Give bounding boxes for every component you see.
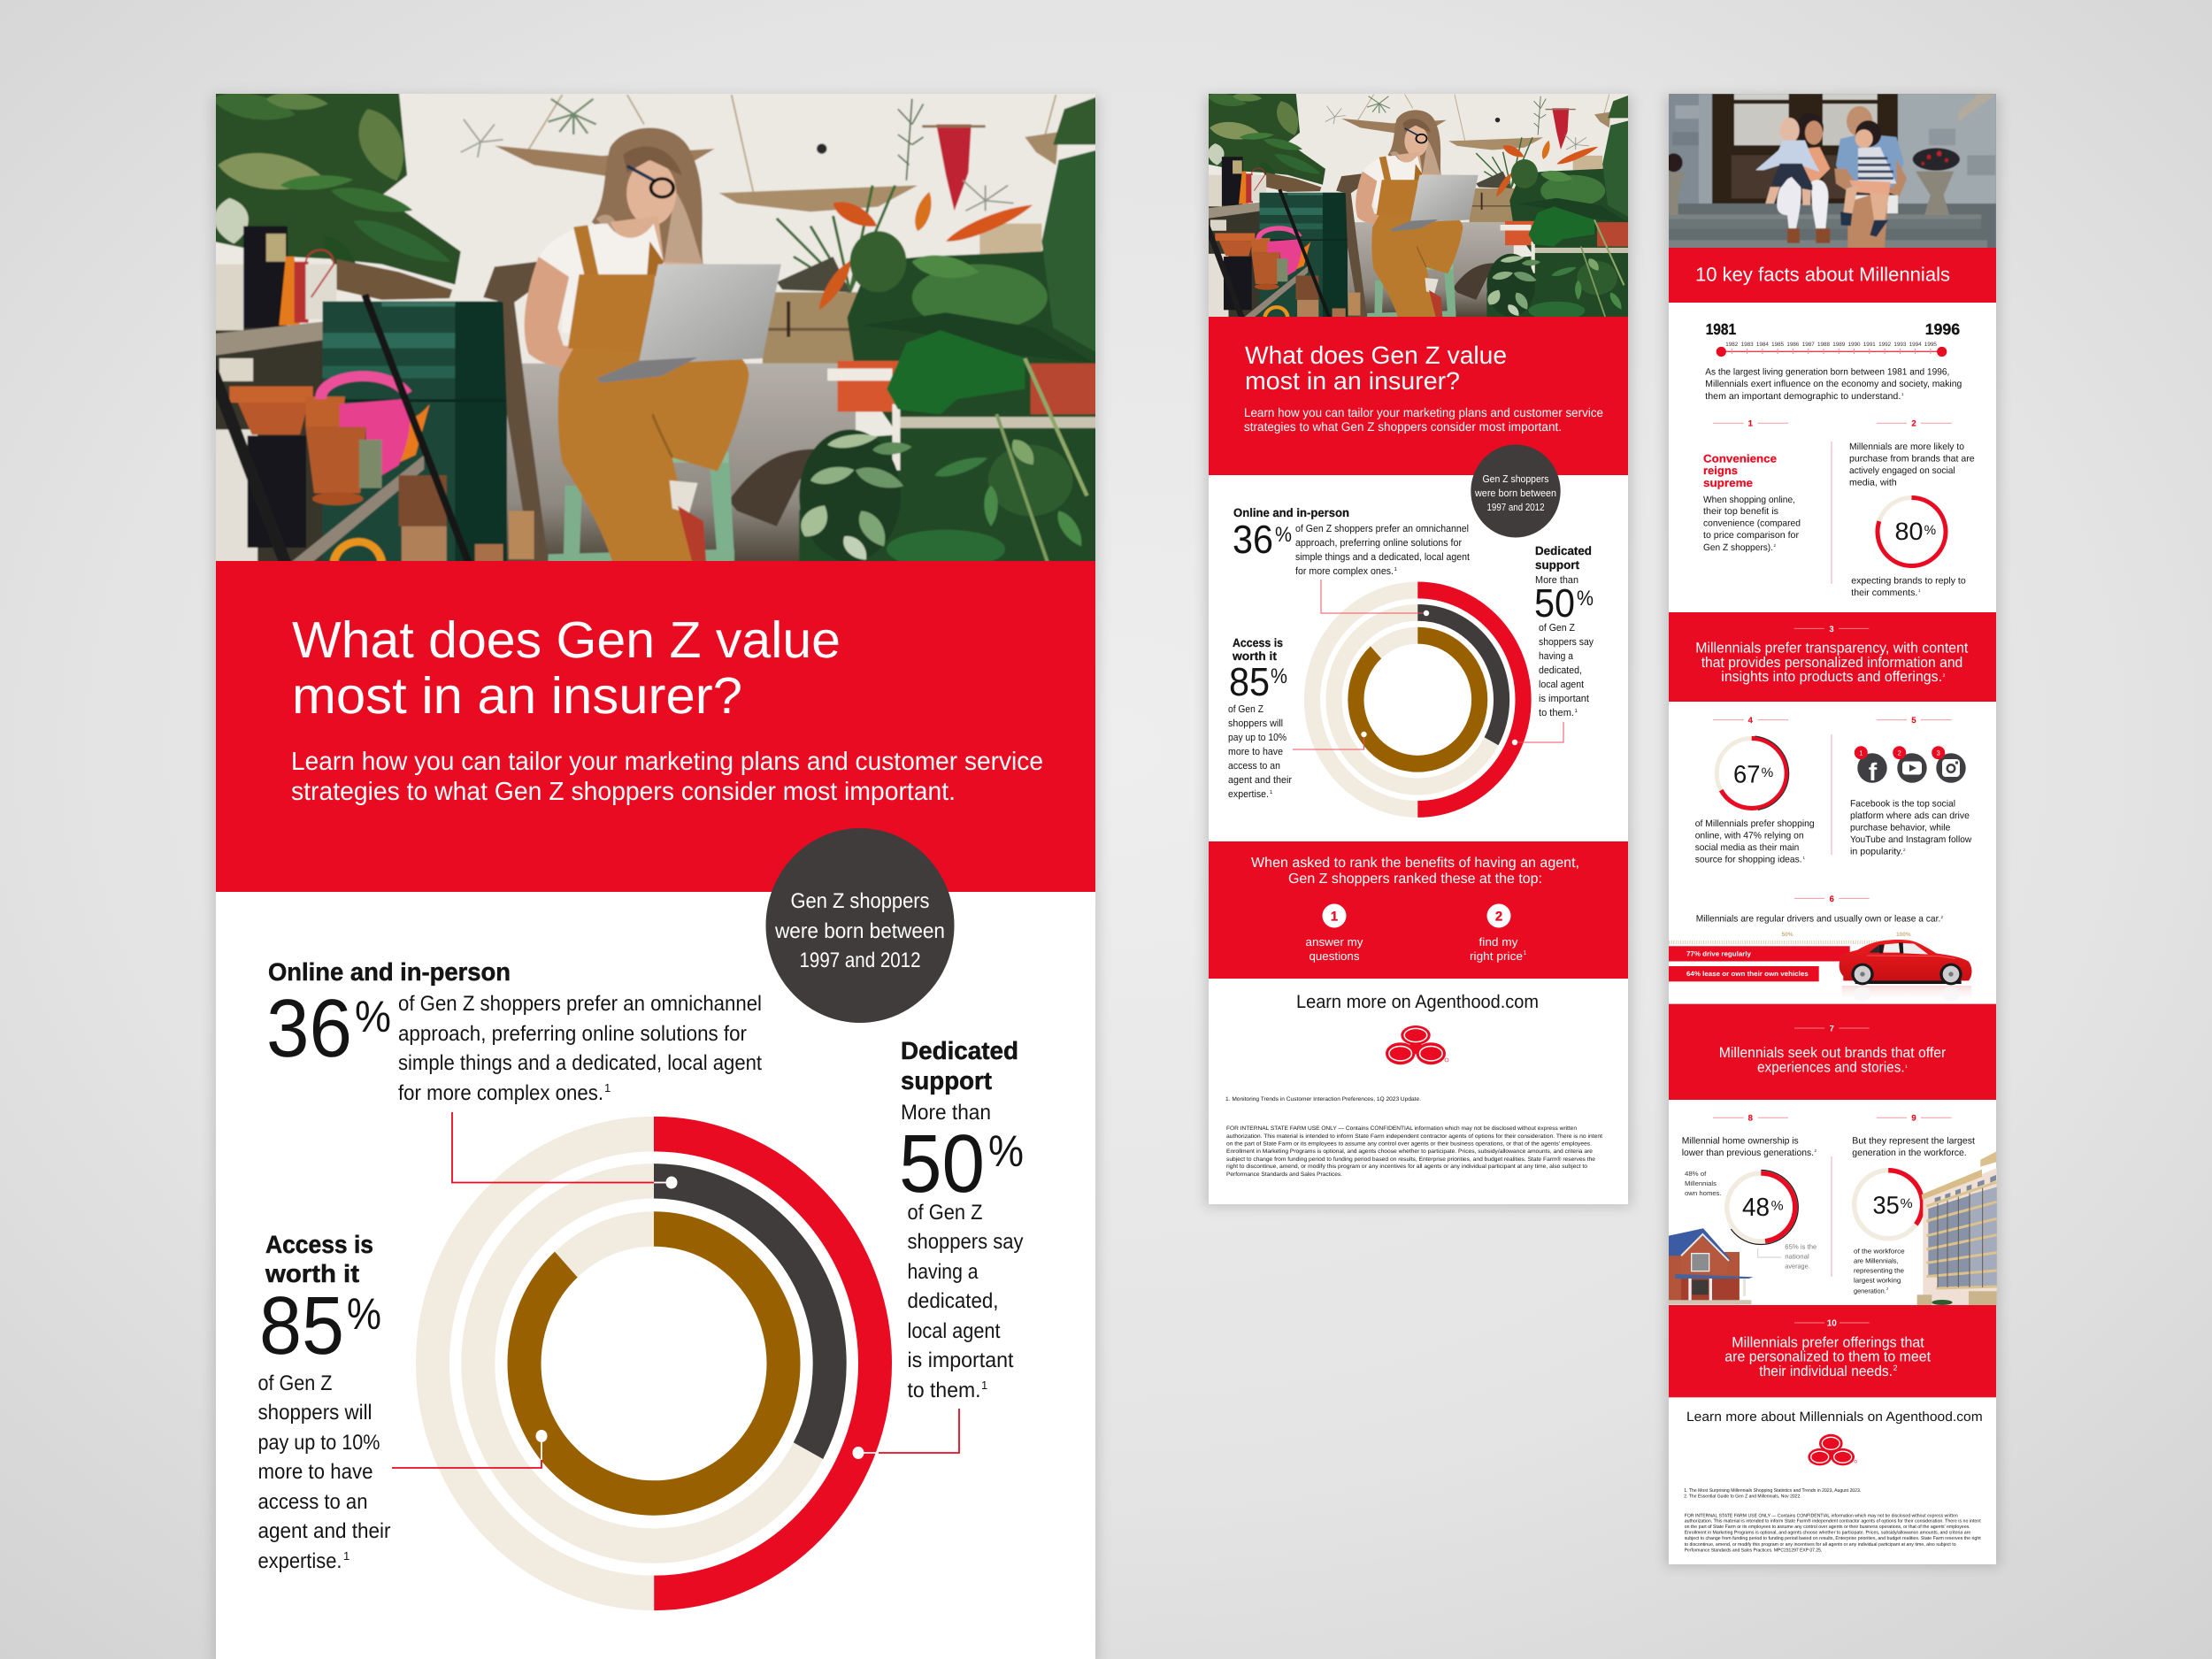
fact 5: social platforms: YouTube and Instagram follow [1850,834,1972,845]
footnote: 1. Monitoring Trends in Customer Interaction Preferences, 1Q 2023 Update. [1225,1096,1421,1102]
stat: access is worth it 85%: expertise. [1228,789,1269,800]
photo: family on front steps [1663,88,2000,252]
fact 2: social media 80%: Millennials are more likely to [1849,442,1964,452]
benefit 2: right price [1470,949,1523,963]
stat: access is worth it 85%: access to an [1228,761,1280,772]
subtitle [291,748,1043,806]
subtitle: strategies to what Gen Z shoppers consider most important. [1244,419,1562,434]
fact 5 heading number [1877,716,1952,726]
fact 6: drivers bar chart [1669,913,1971,1002]
fact 9: workforce 35%: are Millennials, [1854,1256,1899,1264]
fact 9: workforce 35%: largest working [1854,1276,1901,1284]
bar: own or lease [1669,966,1819,981]
donut 35%: % [1901,1196,1913,1211]
stat: access is worth it 85%: shoppers will [258,1401,372,1425]
stat: access is worth it 85%: more to have [1228,747,1283,757]
timeline 1981 to 1996: 1991 [1863,342,1876,348]
subtitle: Learn how you can tailor your marketing plans and customer service [1244,405,1603,419]
title [1245,342,1507,395]
red band: fact 7: 1 [1905,1064,1908,1070]
stat: access is worth it 85%: pay up to 10% [258,1431,380,1455]
callout circle: birth years: Gen Z shoppers [1483,474,1549,485]
legal text: Enrollment in Marketing Programs is optional, and agents choose whether to participate. Prices, subsidy/allowance amounts, and criteria are [1226,1148,1593,1155]
fact 8 heading number: 8 [1748,1114,1753,1124]
fact 2: social media 80%: purchase from brands that are [1849,453,1975,464]
fact 1: convenience: When shopping online, [1703,495,1795,505]
fact 2: social media 80%: 1 [1918,588,1921,593]
illustration: office building [1917,1152,1997,1305]
bar: drive regularly [1669,946,1850,961]
fact 2: social media 80%: expecting brands to reply to [1851,575,1966,586]
stat: dedicated support 50%: to them. [908,1379,980,1402]
fact 5: social platforms: 2 [1903,848,1906,852]
stat: online and in-person 36% [1233,506,1471,577]
donut 67%: 67 [1733,761,1761,788]
stat: access is worth it 85%: agent and their [1228,775,1292,786]
red band: fact 10: 10 [1827,1318,1837,1329]
stat: online and in-person 36%: of Gen Z shoppers prefer an omnichannel [398,992,762,1016]
intro text: 1 [1901,392,1904,396]
stat: dedicated support 50%: % [988,1126,1024,1176]
callout circle: birth years: Gen Z shoppers [791,889,929,913]
fact 5: social platforms [1850,746,1972,857]
stat: dedicated support 50%: of Gen Z [1539,623,1575,634]
stat: access is worth it 85%: % [347,1289,381,1339]
panel: 10 key facts about Millennials [1663,88,2000,1567]
title: What does Gen Z value [292,611,841,669]
fact 1 heading number: 1 [1748,419,1754,428]
stat: dedicated support 50%: More than [901,1101,991,1125]
fact 8 heading number [1713,1114,1788,1124]
stat: dedicated support 50% [899,1037,1024,1402]
fact 4 heading number: 4 [1748,716,1754,726]
red band: fact 3: Millennials prefer transparency, with content [1695,641,1969,657]
red band: fact 10: are personalized to them to meet [1724,1349,1931,1365]
stat: dedicated support 50%: Dedicated [1535,544,1592,557]
subtitle [1244,405,1603,434]
stat: dedicated support 50%: shoppers say [1539,637,1594,648]
stat: online and in-person 36%: for more complex ones. [1295,566,1394,577]
legal text: on the part of State Farm or its employees to assume any control over agents or their business operations, or that of the agents' employees. [1685,1525,1970,1530]
donut 67% [1711,733,1792,814]
legal text [1226,1125,1602,1178]
fact 4: online shopping 67%: online, with 47% relying on [1695,830,1804,841]
red band: fact 7: Millennials seek out brands that offer [1719,1045,1947,1061]
panel: small Gen Z infographic [1205,90,1632,1207]
fact 8: home ownership 48%: own homes. [1685,1189,1722,1197]
leader line: dedicated support [853,1409,959,1459]
footnotes: 1. The Most Surprising Millennials Shopping Statistics and Trends in 2023, August 2023. [1684,1488,1861,1494]
timeline 1981 to 1996: 1987 [1802,342,1815,348]
fact 6: drivers bar chart: 100% [1896,932,1911,938]
fact 1: convenience: their top benefit is [1703,506,1778,517]
timeline 1981 to 1996: 1985 [1771,342,1785,348]
fact 5 heading number: 5 [1911,716,1916,726]
title band [1669,248,1996,303]
stat: access is worth it 85% [1228,636,1292,800]
red band: fact 7: experiences and stories. [1757,1059,1905,1075]
stat: online and in-person 36%: Online and in-person [268,958,511,986]
red band: fact 7 [1669,1004,1996,1100]
subtitle: Learn how you can tailor your marketing plans and customer service [291,748,1043,776]
fact 9 heading number [1877,1114,1952,1124]
fact 8: home ownership 48%: lower than previous generations. [1682,1148,1814,1158]
fact 9: workforce 35%: of the workforce [1854,1248,1905,1256]
title: most in an insurer? [292,667,742,725]
donut 35%: 35 [1872,1192,1900,1219]
stat: dedicated support 50%: shoppers say [908,1230,1023,1254]
donut 80%: % [1924,523,1936,538]
legal text: subject to change from funding period to funding period based on results, Enterprise priorities, and budget realities. State Farm® reserves the [1226,1156,1595,1163]
benefit 2: 1 [1524,950,1527,956]
fact 4: online shopping 67%: of Millennials prefer shopping [1695,818,1815,829]
timeline 1981 to 1996: 1984 [1756,342,1769,348]
fact 8: home ownership 48%: average. [1785,1263,1810,1271]
legal text: authorization. This material is intended to inform State Farm® independent contractor agents of options for their consideration. There is no intent [1685,1519,1981,1525]
stat: access is worth it 85%: 1 [1270,789,1273,795]
stat: dedicated support 50%: local agent [908,1319,1001,1343]
stat: access is worth it 85%: Access is [1233,636,1283,649]
stat: dedicated support 50%: % [1577,587,1594,611]
callout circle: birth years [1471,444,1561,538]
intro text: As the largest living generation born between 1981 and 1996, [1705,367,1949,378]
fact 8: home ownership 48%: 65% is the [1785,1243,1816,1251]
call to action: Learn more about Millennials on Agenthood.com [1686,1409,1983,1425]
intro text [1705,367,1962,402]
radial chart [433,1134,875,1593]
fact 2: social media 80%: media, with [1849,478,1897,488]
red band: fact 10: their individual needs. [1759,1363,1893,1379]
benefit 2 [1470,904,1527,963]
donut 48%: % [1771,1198,1784,1213]
fact 2: social media 80%: their comments. [1851,588,1917,598]
benefit 2: find my [1479,935,1518,949]
stat: online and in-person 36%: for more complex ones. [398,1081,603,1105]
stat: dedicated support 50%: support [901,1067,992,1094]
red band: fact 10: Millennials prefer offerings that [1732,1334,1924,1350]
icon: instagram: 3 [1937,749,1940,757]
fact 4 heading number [1713,716,1788,726]
title: most in an insurer? [1245,367,1460,395]
red band: fact 3: insights into products and offerings. [1721,669,1942,685]
stat: access is worth it 85%: Access is [265,1231,373,1258]
fact 5: social platforms: platform where ads can drive [1850,810,1970,821]
red band: fact 10: 2 [1893,1363,1898,1372]
stat: dedicated support 50%: to them. [1539,708,1574,718]
stat: dedicated support 50%: dedicated, [1539,665,1582,676]
fact 2 heading number: 2 [1911,419,1916,428]
fact 1: convenience: to price comparison for [1703,530,1800,541]
stat: dedicated support 50%: support [1535,558,1579,572]
icon: red car [1839,940,1971,1002]
stat: online and in-person 36% [266,958,762,1105]
red band: fact 10 [1669,1305,1996,1397]
legal text: on the part of State Farm or its employees to assume any control over agents or their business operations, or that of the agents' employees. [1226,1141,1592,1147]
fact 8: home ownership 48%: national [1785,1253,1809,1261]
benefit 2: 2 [1495,910,1502,924]
stat: access is worth it 85%: expertise. [258,1549,342,1573]
stat: access is worth it 85%: of Gen Z [1228,704,1263,715]
fact 9 heading number: 9 [1911,1114,1916,1124]
stat: access is worth it 85%: % [1271,664,1287,688]
fact 6: drivers bar chart: 2 [1941,915,1943,919]
callout circle: birth years: 1997 and 2012 [1486,503,1545,513]
stat: dedicated support 50%: having a [908,1260,979,1284]
fact 2: social media 80% [1849,442,1975,598]
stat: access is worth it 85%: pay up to 10% [1228,733,1286,743]
stat: access is worth it 85%: 1 [343,1549,349,1563]
fact 4: online shopping 67% [1695,733,1815,865]
title [292,611,841,725]
benefit 1 [1306,904,1363,963]
bar: own or lease: 64% lease or own their own vehicles [1686,970,1809,978]
fact 1: convenience [1703,452,1801,553]
fact 5: social platforms: purchase behavior, while [1850,823,1950,833]
fact 4: online shopping 67%: social media as their main [1695,842,1799,853]
stat: access is worth it 85%: 85 [259,1279,344,1371]
legal text: Performance Standards and Sales Practices. MPC231297 EXP 07.25. [1685,1548,1822,1553]
stat: dedicated support 50%: having a [1539,651,1574,662]
fact 5: social platforms: in popularity. [1850,847,1903,857]
stat: online and in-person 36%: 36 [1233,517,1273,562]
stat: online and in-person 36%: approach, preferring online solutions for [398,1022,747,1046]
benefit 1: questions [1310,949,1360,963]
stat: online and in-person 36%: of Gen Z shoppers prefer an omnichannel [1295,524,1469,534]
stat: dedicated support 50%: 50 [1534,580,1575,626]
stat: access is worth it 85%: worth it [265,1260,359,1287]
stat: dedicated support 50%: Dedicated [901,1037,1018,1064]
fact 1: convenience: Convenience [1703,452,1777,465]
stat: dedicated support 50%: dedicated, [908,1289,998,1313]
logo: three ovals [1808,1434,1857,1465]
donut 67%: % [1762,765,1773,780]
stat: dedicated support 50%: More than [1535,575,1578,586]
timeline 1981 to 1996: 1994 [1909,342,1922,348]
leader line: access is worth it [392,1430,547,1468]
legal text: FOR INTERNAL STATE FARM USE ONLY — Contains CONFIDENTIAL information which may not be disclosed without express written [1685,1513,1958,1518]
photo: woman with laptop among plants [210,87,1098,568]
red band: fact 3: that provides personalized information and [1701,655,1962,671]
fact 9: workforce 35%: generation in the workforce. [1852,1148,1967,1158]
title: What does Gen Z value [1245,342,1507,369]
fact 9: workforce 35%: But they represent the largest [1852,1136,1975,1147]
stat: dedicated support 50%: 50 [899,1118,985,1210]
legal text: authorization. This material is intended to inform State Farm independent contractor agents of options for their consideration. There is no intent [1226,1133,1602,1140]
fact 2 heading number [1877,419,1952,428]
stat: access is worth it 85% [258,1231,391,1573]
stat: dedicated support 50%: 1 [1575,708,1578,714]
donut 35% [1855,1171,1923,1239]
timeline 1981 to 1996: 1986 [1786,342,1800,348]
timeline 1981 to 1996: 1993 [1893,342,1907,348]
intro text: them an important demographic to understand. [1705,391,1901,402]
stat: online and in-person 36%: simple things and a dedicated, local agent [1295,552,1471,563]
fact 9: workforce 35% [1852,1136,1997,1305]
legal text: Performance Standards and Sales Practices. [1226,1171,1342,1178]
fact 1: convenience: 2 [1773,543,1777,548]
stat: online and in-person 36%: % [355,992,391,1041]
donut 80%: 80 [1895,518,1924,545]
stat: dedicated support 50%: 1 [981,1379,987,1392]
fact 1: convenience: Gen Z shoppers). [1703,542,1773,553]
red band: agent benefits: Gen Z shoppers ranked these at the top: [1288,872,1542,887]
fact 1: convenience: supreme [1703,477,1753,489]
legal text: Enrollment in Marketing Programs is optional, and agents choose whether to participate. Prices, subsidy/allowance amounts, and criteria are [1685,1531,1970,1536]
timeline 1981 to 1996: 1996 [1925,320,1960,338]
stat: access is worth it 85%: access to an [258,1490,368,1514]
subtitle: strategies to what Gen Z shoppers consider most important. [291,778,956,806]
stat: access is worth it 85%: of Gen Z [258,1371,333,1395]
donut 48% [1724,1170,1798,1244]
legal text: right to discontinue, amend, or modify this program or any incentives for all agents or any individual participant at any time, also subject to [1226,1164,1587,1170]
donut 80% [1878,497,1946,566]
callout circle: birth years: were born between [774,919,945,943]
footnotes [1684,1488,1861,1499]
fact 2: social media 80%: actively engaged on social [1849,465,1955,476]
fact 5: social platforms: Facebook is the top social [1850,798,1955,809]
fact 6 heading number [1794,895,1870,904]
timeline 1981 to 1996: 1992 [1878,342,1892,348]
benefit 1: 1 [1331,910,1338,924]
stat: dedicated support 50%: is important [908,1348,1014,1372]
timeline 1981 to 1996: 1983 [1741,342,1754,348]
fact 8: home ownership 48%: Millennials [1685,1179,1717,1187]
legal text: to discontinue, amend, or modify this program or any incentives for all agents or any individual participant at any time, also subject to [1685,1542,1956,1548]
icon: facebook: 1 [1859,749,1863,757]
stat: access is worth it 85%: shoppers will [1228,718,1283,729]
benefit 1: answer my [1306,935,1363,949]
timeline 1981 to 1996: 1988 [1817,342,1830,348]
stat: access is worth it 85%: worth it [1232,649,1278,663]
illustration: brick house [1669,1228,1754,1304]
stat: online and in-person 36%: 1 [604,1081,611,1094]
icon: facebook [1855,746,1887,786]
timeline 1981 to 1996: 1989 [1832,342,1846,348]
stat: online and in-person 36%: approach, preferring online solutions for [1295,538,1462,549]
panel: large Gen Z infographic [210,87,1099,1659]
legal text: FOR INTERNAL STATE FARM USE ONLY — Contains CONFIDENTIAL information which may not be disclosed without express written [1226,1125,1577,1132]
red band: fact 7: 7 [1830,1025,1834,1033]
fact 8: home ownership 48%: 48% of [1685,1170,1707,1178]
call to action: Learn more on Agenthood.com [1296,992,1539,1012]
stat: online and in-person 36%: simple things and a dedicated, local agent [398,1051,762,1075]
legal text: subject to change from funding period to funding period based on results, Enterprise priorities, and budget realities. State Farm reserves the right [1685,1536,1981,1541]
callout circle: birth years: 1997 and 2012 [800,949,920,972]
fact 4: online shopping 67%: 1 [1803,856,1805,860]
icon: facebook: f [1869,758,1878,786]
stat: access is worth it 85%: agent and their [258,1519,391,1543]
icon: youtube: 2 [1898,749,1901,757]
intro text: Millennials exert influence on the economy and society, making [1705,379,1962,389]
radial chart [1312,590,1524,809]
stat: dedicated support 50%: of Gen Z [908,1201,982,1225]
red band: agent benefits: When asked to rank the benefits of having an agent, [1251,856,1579,871]
donut 48%: 48 [1742,1194,1770,1222]
fact 4: online shopping 67%: source for shopping ideas. [1695,855,1802,865]
timeline 1981 to 1996: 1982 [1725,342,1739,348]
stat: dedicated support 50%: local agent [1539,680,1585,690]
stat: online and in-person 36%: Online and in-person [1233,506,1349,519]
fact 6: drivers bar chart: Millennials are regular drivers and usually own or lease a car. [1696,913,1940,924]
red band: fact 3: 3 [1829,625,1834,634]
leader line: online and in-person [452,1112,678,1189]
logo: three ovals [1386,1025,1448,1064]
timeline 1981 to 1996: 1981 [1706,320,1736,338]
stat: dedicated support 50%: is important [1539,694,1590,704]
timeline 1981 to 1996: 1995 [1924,342,1937,348]
fact 8: home ownership 48%: Millennial home ownership is [1682,1136,1799,1147]
stat: access is worth it 85%: more to have [258,1460,373,1484]
stat: online and in-person 36%: 1 [1394,566,1398,572]
fact 9: workforce 35%: representing the [1854,1266,1904,1274]
stat: access is worth it 85%: 85 [1229,659,1270,704]
fact 1: convenience: reigns [1703,465,1738,477]
footnotes: 2. The Essential Guide to Gen Z and Millennials, Nov 2022. [1684,1494,1801,1499]
fact 1 heading number [1713,419,1788,428]
fact 8: home ownership 48% [1682,1136,1817,1271]
bar: drive regularly: 77% drive regularly [1686,950,1752,958]
photo: woman with laptop thumbnail [1206,90,1630,320]
red band: fact 3 [1669,612,1996,702]
red header band [216,561,1095,892]
red band: fact 3: 2 [1943,673,1945,679]
timeline 1981 to 1996: 1990 [1847,342,1861,348]
fact 8: home ownership 48%: 2 [1814,1148,1817,1153]
red header band [1209,317,1628,475]
fact 9: workforce 35%: generation. [1854,1287,1886,1295]
fact 9: workforce 35%: 2 [1886,1286,1889,1291]
fact 1: convenience: convenience (compared [1703,518,1801,529]
timeline 1981 to 1996 [1706,320,1960,357]
callout circle: birth years: were born between [1474,488,1556,499]
title band: 10 key facts about Millennials [1695,264,1950,285]
leader lines [1293,580,1563,749]
red band: agent benefits [1209,841,1628,979]
stat: online and in-person 36%: 36 [266,982,352,1074]
stat: online and in-person 36%: % [1275,523,1292,547]
legal text [1685,1513,1981,1553]
callout circle: birth years [766,828,954,1023]
fact 6: drivers bar chart: 50% [1781,932,1793,938]
stat: dedicated support 50% [1534,544,1594,718]
fact 6 heading number: 6 [1830,895,1834,904]
